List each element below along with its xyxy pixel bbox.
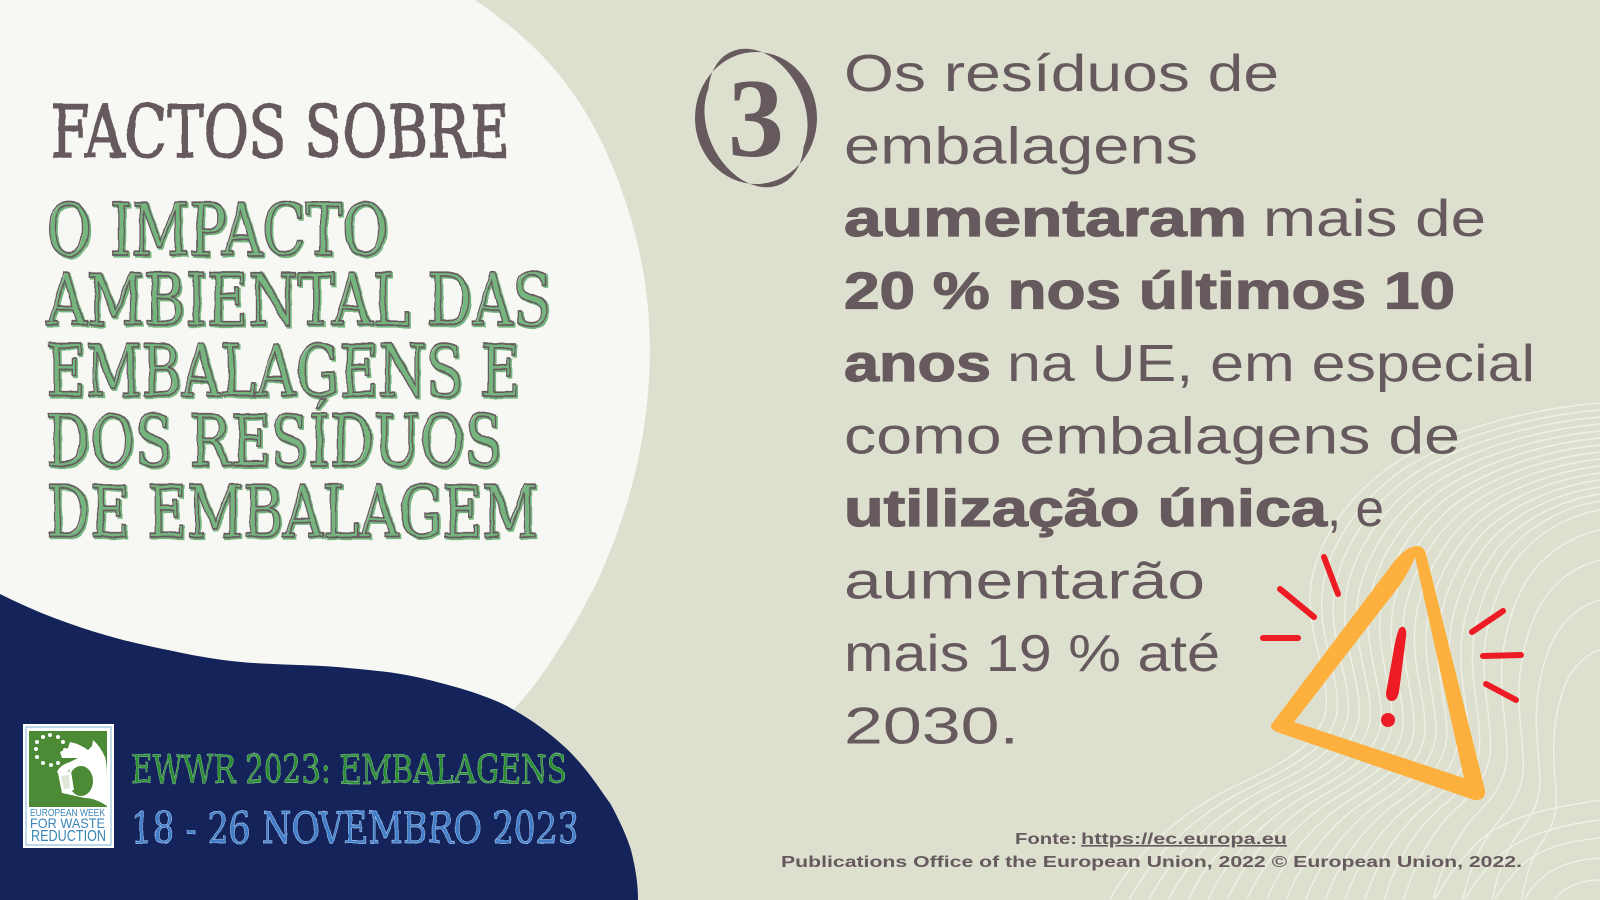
panel: light blob background <box>0 0 650 710</box>
panel: navy wave <box>0 594 638 900</box>
text: event dates: 18 - 26 NOVEMBRO 2023 <box>131 804 579 854</box>
text block: main fact: utilização única <box>844 480 1328 538</box>
icon: circled number three: 3 <box>728 57 784 181</box>
text block: main fact: anos <box>844 335 991 393</box>
text block: main fact: aumentarão <box>844 552 1205 610</box>
title: impacto ambiental: EMBALAGENS E <box>46 329 520 413</box>
text block: main fact <box>844 45 1535 756</box>
text: source: Publications Office of the European Union, 2022 © European Union, 2022. <box>781 854 1522 871</box>
logo: European Week for Waste Reduction: REDUCTION <box>31 828 106 845</box>
title: impacto ambiental: DE EMBALAGEM <box>46 470 538 554</box>
title: impacto ambiental: O IMPACTO <box>46 188 388 272</box>
text: source <box>781 831 1522 871</box>
text block: main fact: Os resíduos de <box>844 45 1279 103</box>
text block: main fact: mais de <box>1263 190 1486 248</box>
logo: European Week for Waste Reduction: FOR WASTE <box>30 815 105 831</box>
text: source: https://ec.europa.eu <box>1081 831 1287 848</box>
text block: main fact: mais 19 % até <box>844 625 1220 683</box>
text block: main fact: aumentaram <box>844 190 1247 248</box>
text block: main fact: , e <box>1327 480 1384 538</box>
text: source: Fonte: <box>1015 831 1077 848</box>
icon: ring of stars <box>34 733 67 767</box>
title: impacto ambiental: DOS RESÍDUOS <box>46 398 502 483</box>
logo: European Week for Waste Reduction <box>23 724 114 848</box>
title: impacto ambiental <box>45 188 552 556</box>
title: impacto ambiental: O IMPACTO <box>48 190 390 274</box>
title: impacto ambiental: EMBALAGENS E <box>48 330 522 414</box>
title: impacto ambiental: AMBIENTAL DAS <box>45 258 551 342</box>
icon: circled number three <box>695 49 817 187</box>
title: impacto ambiental: DE EMBALAGEM <box>48 472 540 556</box>
title: impacto ambiental: DOS RESÍDUOS <box>48 400 504 484</box>
text: EWWR theme: EWWR 2023: EMBALAGENS <box>131 748 567 793</box>
logo: European Week for Waste Reduction: EUROPEAN WEEK <box>30 808 105 819</box>
text block: main fact: como embalagens de <box>844 408 1460 466</box>
icon: warning triangle <box>1263 546 1521 800</box>
text block: main fact: embalagens <box>844 118 1198 176</box>
text block: main fact: na UE, em especial <box>1007 335 1535 393</box>
title: impacto ambiental: AMBIENTAL DAS <box>47 260 552 344</box>
text block: main fact: 2030. <box>844 698 1019 756</box>
heading: factos sobre: FACTOS SOBRE <box>51 90 510 174</box>
text block: main fact: 20 % nos últimos 10 <box>844 262 1455 320</box>
icon: hand holding waste <box>57 740 107 806</box>
